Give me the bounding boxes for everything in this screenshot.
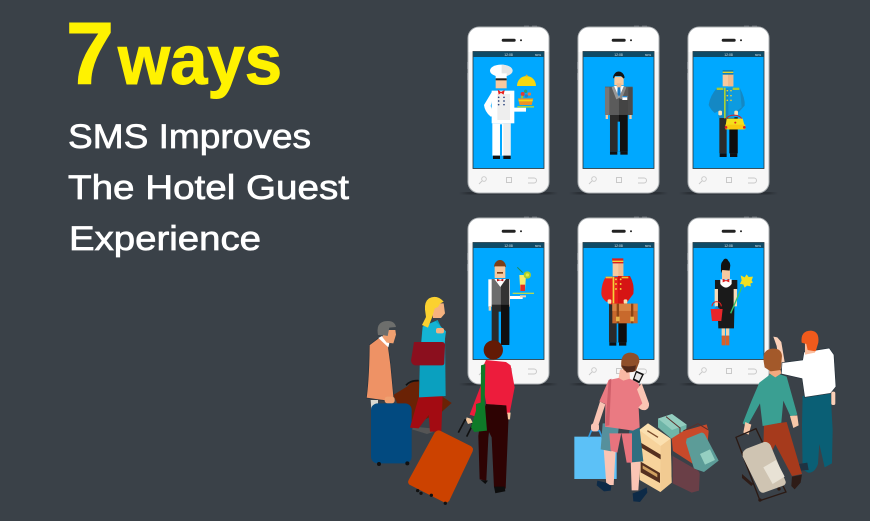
title: 7 ways: ways [117,21,282,99]
woman in red top [466,340,515,493]
group: traveller with luggage [574,353,719,502]
man in pink shirt [591,353,649,502]
luggage pile [639,414,719,493]
icon: manager [605,71,633,155]
man in teal sweater [742,349,802,489]
icon: chef [484,65,536,159]
subtitle text [68,118,350,258]
beige rolling suitcase [736,429,786,502]
title: 7 ways [66,4,282,103]
phone: top left [459,26,558,194]
man in white shirt pointing [773,331,836,473]
subtitle text: SMS Improves [68,118,311,156]
man in salmon jacket [366,321,396,410]
icon: waiter with drink [488,260,534,345]
icon: housekeeper with bucket and duster [711,259,753,345]
light blue shopping bag [574,431,617,479]
title: 7 ways: 7 [66,4,114,103]
subtitle text: The Hotel Guest [68,169,350,207]
subtitle text: Experience [69,220,261,258]
icon: bellman with suitcase [601,258,638,346]
phone: bottom middle [569,216,668,386]
phone: bottom left [459,216,558,386]
group: travellers on the left [366,297,515,505]
icon: bellhop with handbag [709,70,746,157]
phone: bottom right [679,216,778,386]
woman in blue coat [410,297,446,434]
blue suitcase [371,403,412,466]
brown duffel bag [393,380,452,427]
phone: top middle [569,26,668,194]
group: two men on the right [736,331,836,502]
phone: top right [679,26,778,194]
orange suitcase [408,420,473,505]
